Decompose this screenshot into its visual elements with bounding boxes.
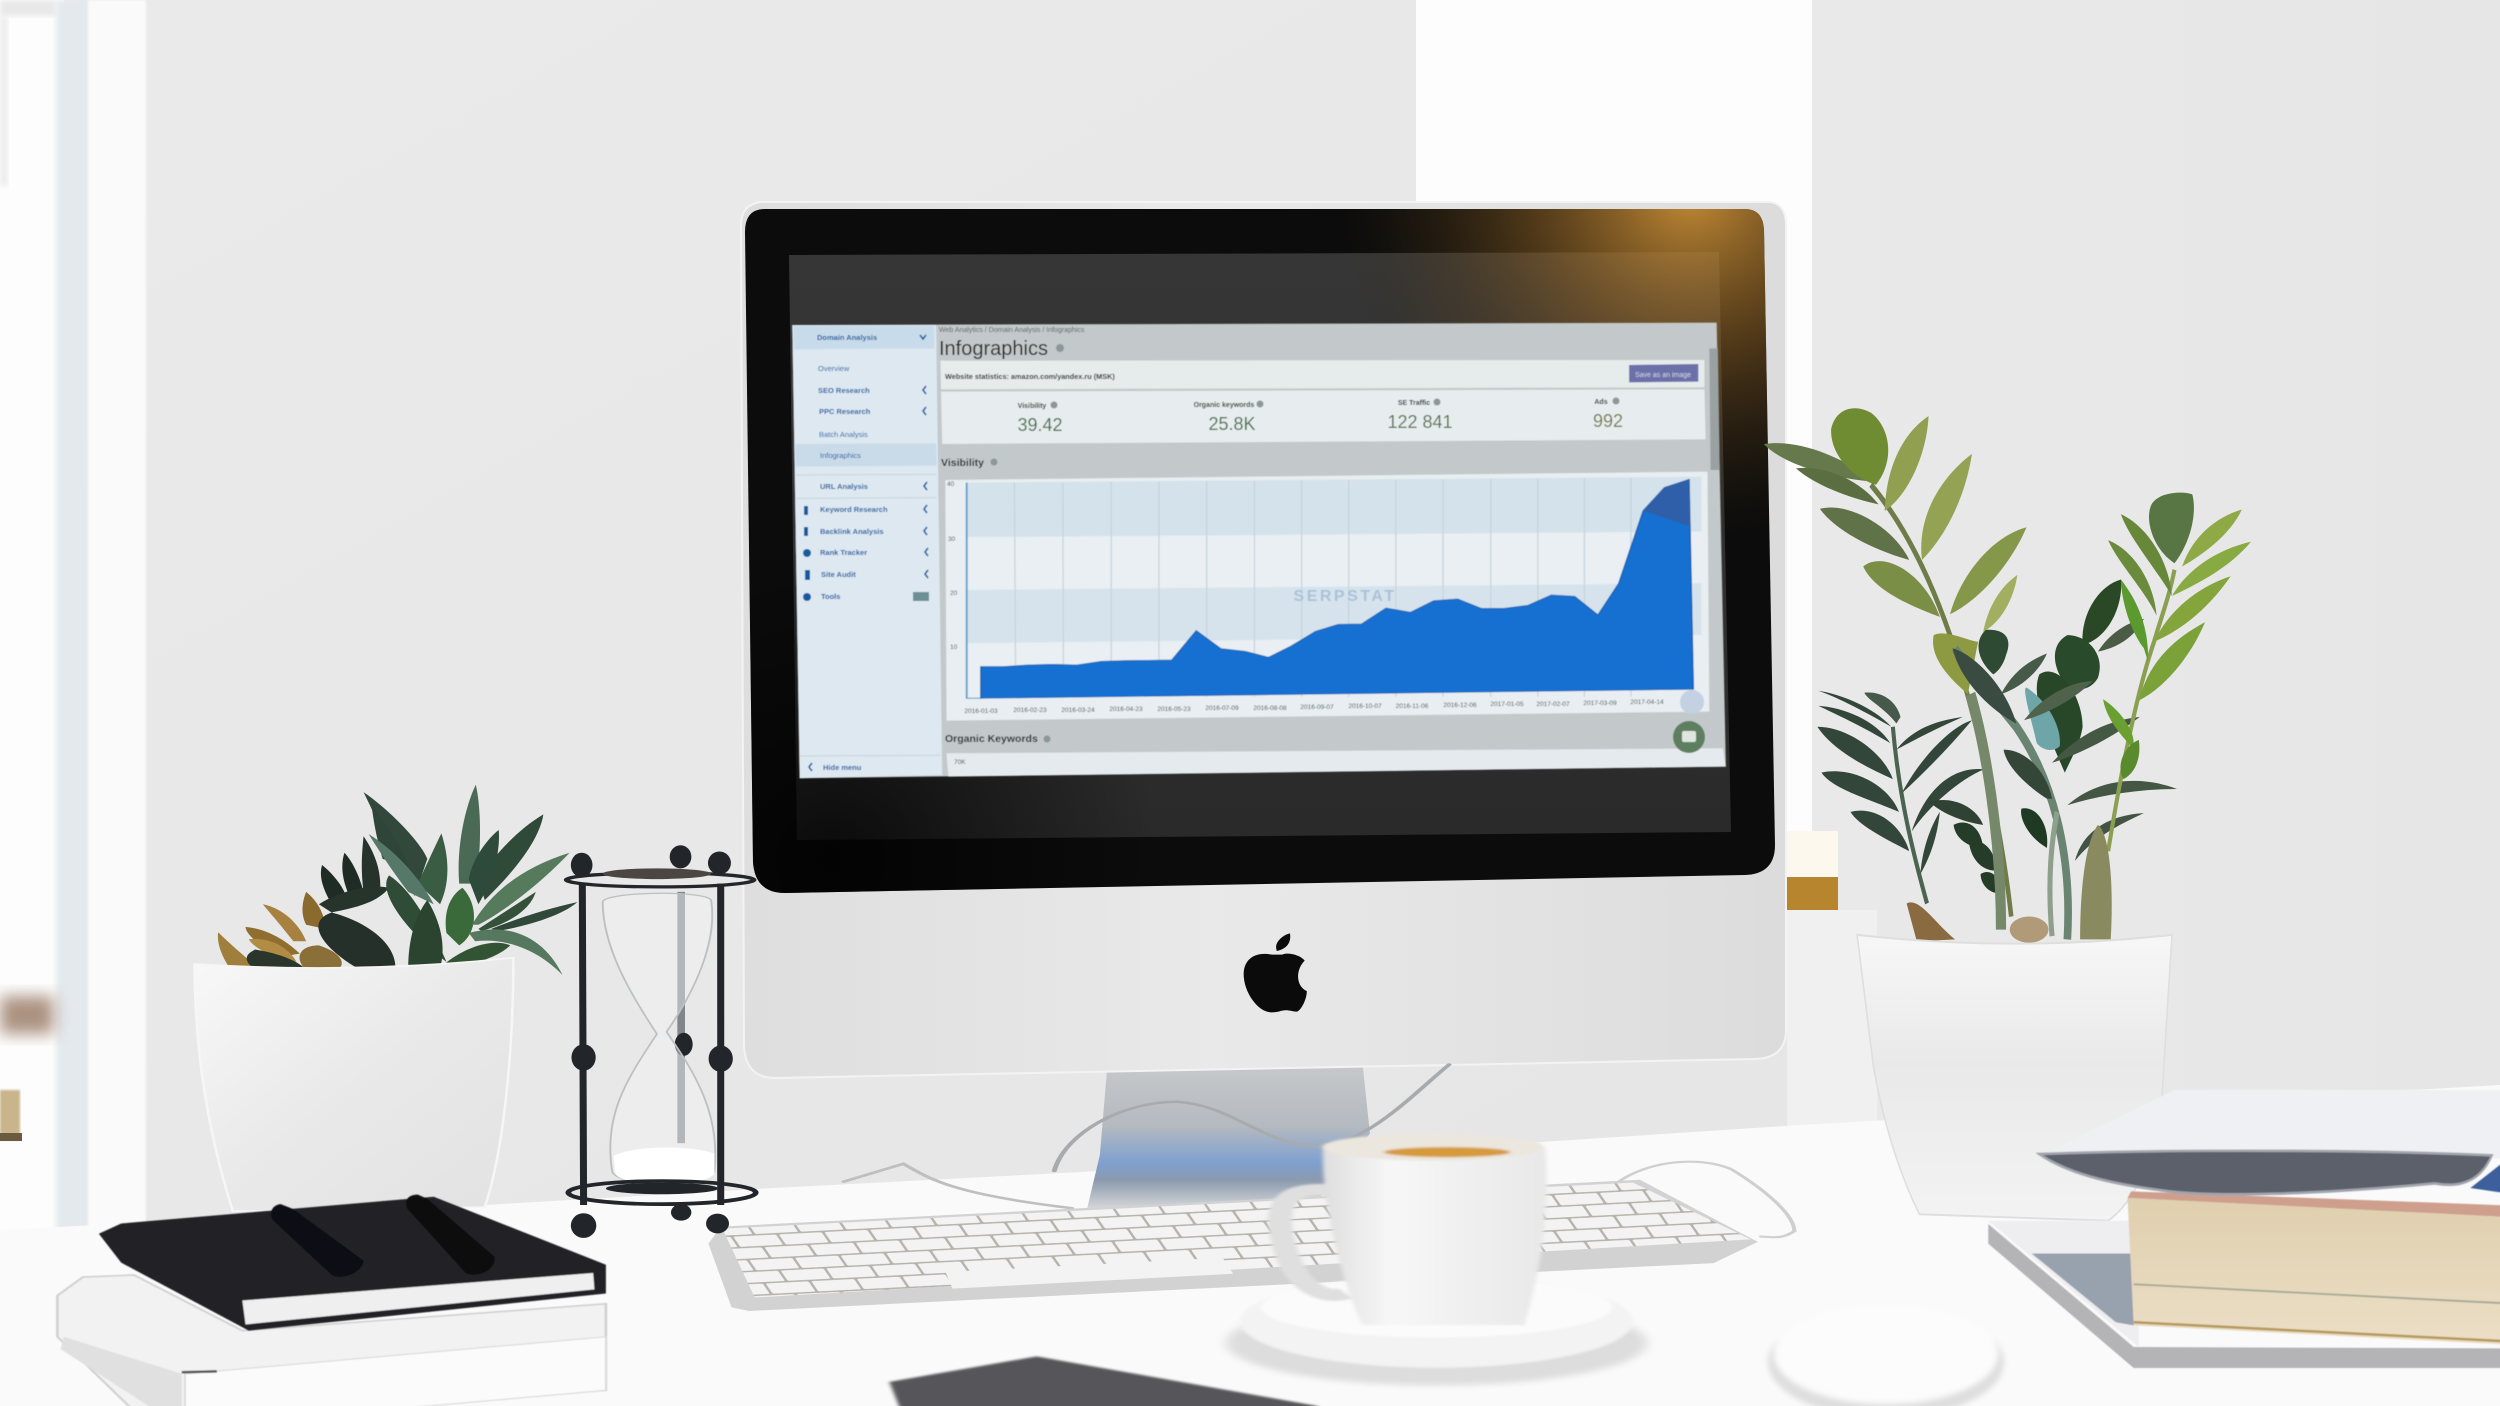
sidebar menu: Rank Tracker — [820, 548, 867, 557]
black bezel with glare — [745, 200, 1800, 900]
y axis — [967, 483, 982, 698]
sidebar menu — [817, 333, 888, 772]
statistics row: Ads — [1594, 399, 1608, 406]
computer monitor — [741, 200, 1800, 1078]
upper branch — [1764, 408, 2027, 917]
paper book — [2128, 1198, 2500, 1345]
sidebar menu: Tools — [821, 592, 840, 601]
pen two — [406, 1195, 495, 1275]
chart axis labels: 2017-03-09 — [1583, 700, 1617, 707]
open magazine — [2042, 1090, 2500, 1159]
middle dark branch — [1930, 580, 2177, 939]
white pot — [1857, 935, 2172, 1221]
blue area — [981, 479, 1693, 698]
mouse — [1768, 1304, 2004, 1406]
handle — [1280, 1190, 1345, 1295]
cables — [844, 1065, 1449, 1208]
chart axis labels: 2017-04-14 — [1630, 699, 1664, 706]
chart axis labels: 40 — [947, 481, 955, 488]
web page on screen — [792, 323, 1726, 778]
phone — [889, 1356, 1317, 1406]
statistics row: SE Traffic — [1398, 400, 1430, 407]
sidebar menu: Infographics — [820, 451, 861, 460]
statistics row: Visibility — [1018, 403, 1046, 410]
chat widget — [1673, 690, 1705, 753]
green aloe — [364, 785, 577, 975]
right bright branch — [1907, 493, 2251, 943]
frame cap and knobs — [571, 845, 733, 1238]
sidebar menu: PPC Research — [819, 407, 871, 416]
watermark: SERPSTAT — [1294, 588, 1396, 605]
mug body — [1323, 1148, 1547, 1325]
section headings: Visibility — [941, 457, 984, 469]
sidebar menu: Hide menu — [823, 763, 862, 772]
monitor silver body — [741, 202, 1786, 1078]
chart axis labels: 2016-09-07 — [1300, 704, 1334, 711]
page header text: Website statistics: amazon.com/yandex.ru (MSK) — [945, 372, 1115, 381]
sidebar menu: SEO Research — [818, 386, 870, 395]
chart axis labels: 2016-07-09 — [1205, 705, 1239, 712]
sidebar menu: Domain Analysis — [817, 333, 877, 342]
notebook — [99, 1197, 606, 1331]
statistics row: 39.42 — [1017, 415, 1063, 435]
sidebar menu: URL Analysis — [820, 482, 868, 491]
chart axis labels — [947, 481, 1664, 766]
chart axis labels: 2017-01-05 — [1490, 701, 1524, 708]
sidebar icons and chevrons — [803, 335, 929, 771]
chart axis labels: 2017-02-07 — [1536, 701, 1570, 708]
chart axis labels: 20 — [950, 590, 958, 597]
saucer shadow — [1226, 1300, 1647, 1385]
chart bands — [967, 477, 1701, 698]
white desk — [0, 1085, 2500, 1406]
chart axis labels: 30 — [948, 536, 956, 543]
black notebook with pens — [99, 1195, 606, 1331]
chart axis labels: 2016-04-23 — [1109, 706, 1143, 713]
chart axis labels: 2016-01-03 — [964, 708, 998, 715]
page header text — [939, 327, 1691, 381]
section headings: Organic Keywords — [945, 733, 1038, 745]
page header text: Infographics — [939, 338, 1048, 360]
sidebar menu: Keyword Research — [820, 505, 888, 514]
statistics row: Organic keywords — [1194, 402, 1254, 409]
chart axis labels: 2016-11-06 — [1396, 703, 1429, 710]
right keyboard cable — [1619, 1162, 1794, 1237]
sidebar menu: Site Audit — [821, 570, 856, 579]
computer stand — [1087, 1067, 1370, 1208]
chart axis labels: 2016-02-23 — [1013, 707, 1047, 714]
dark succulent — [247, 836, 395, 970]
coffee mug and saucer — [1226, 1134, 1647, 1385]
page header text: Save as an image — [1635, 372, 1691, 379]
dry brown succulent — [218, 892, 325, 970]
sidebar menu: Overview — [818, 364, 850, 373]
chart axis labels: 2016-10-07 — [1348, 703, 1382, 710]
keyboard — [708, 1180, 1758, 1311]
section headings — [941, 457, 1038, 745]
chart axis labels: 2016-12-06 — [1443, 702, 1477, 709]
chart axis labels: 70K — [954, 759, 966, 766]
chart axis labels: 2016-08-08 — [1253, 705, 1287, 712]
white book — [57, 1275, 606, 1406]
statistics row: 122 841 — [1387, 412, 1453, 432]
left dark branch — [1817, 691, 1984, 903]
sidebar menu: Batch Analysis — [819, 430, 868, 439]
chart axis labels: 2016-03-24 — [1061, 707, 1095, 714]
sidebar menu: Backlink Analysis — [820, 527, 884, 536]
chart axis labels: 10 — [950, 644, 958, 651]
rear pole — [677, 892, 685, 1143]
white pot — [195, 958, 513, 1211]
statistics row — [1017, 399, 1623, 435]
page shapes — [792, 323, 1726, 778]
coffee — [1384, 1147, 1510, 1157]
magazine under stack — [1988, 1224, 2500, 1368]
statistics row: 992 — [1593, 411, 1623, 431]
books and magazine — [1988, 1090, 2500, 1368]
metal frame — [566, 873, 756, 1205]
hourglass — [566, 845, 756, 1238]
glass bulbs — [603, 893, 715, 1184]
chart axis labels: 2016-05-23 — [1157, 706, 1191, 713]
visibility area chart — [967, 477, 1701, 698]
apple logo — [1244, 933, 1307, 1012]
statistics row: 25.8K — [1208, 414, 1256, 434]
pen one — [271, 1204, 364, 1277]
left plant — [195, 785, 577, 1211]
sand — [614, 1148, 714, 1185]
saucer — [1240, 1276, 1633, 1368]
info dots — [990, 344, 1620, 742]
page header text: Web Analytics / Domain Analysis / Infographics — [939, 327, 1085, 334]
right plant — [1764, 408, 2251, 1221]
